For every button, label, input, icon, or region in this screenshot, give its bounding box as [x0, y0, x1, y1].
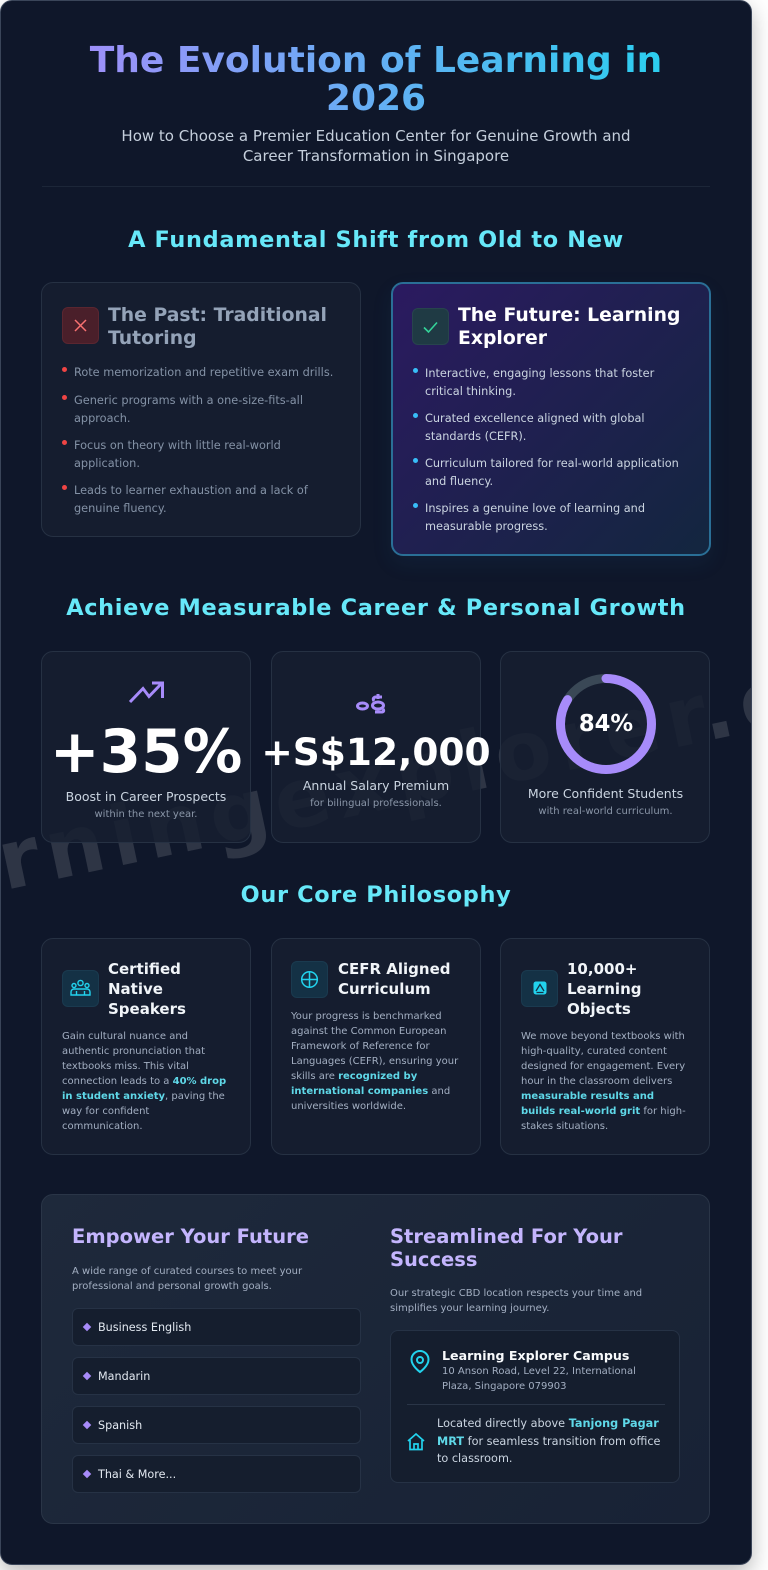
- title: [42, 42, 710, 118]
- list: future: Inspires a genuine love of learning and: [425, 502, 645, 515]
- heading: [567, 960, 642, 1018]
- heading: Speakers: [108, 1000, 186, 1018]
- heading: streamlined: Streamlined For Your: [390, 1225, 622, 1248]
- subtitle: How to Choose a Premier Education Center for Genuine Growth and: [121, 127, 631, 145]
- text: skills are recognized by: [291, 1071, 417, 1082]
- list: future: Interactive, engaging lessons that foster: [425, 367, 654, 380]
- heading: future: Explorer: [458, 328, 547, 349]
- stat label: Annual Salary Premium: [303, 778, 449, 793]
- panel: confidence stat: [500, 651, 710, 843]
- text: Languages (CEFR), ensuring your: [291, 1056, 458, 1067]
- heading: Objects: [567, 1000, 631, 1018]
- heading: past: The Past: Traditional: [108, 305, 327, 326]
- heading: shift: A Fundamental Shift from Old to New: [128, 227, 624, 253]
- text: Your progress is benchmarked: [291, 1011, 442, 1022]
- stat label: Boost in Career Prospects: [66, 789, 226, 804]
- heading: streamlined: Success: [390, 1248, 477, 1271]
- heading: 10,000+: [567, 960, 637, 978]
- heading: future: The Future: Learning: [458, 305, 680, 326]
- stat note: for bilingual professionals.: [310, 798, 442, 809]
- text: designed for engagement. Every: [521, 1061, 685, 1072]
- stat: 84%: 84%: [579, 711, 633, 737]
- text: measurable results and: [521, 1091, 654, 1102]
- text: international companies and: [291, 1086, 450, 1097]
- list: future: [413, 367, 679, 533]
- list: future: measurable progress.: [425, 520, 548, 533]
- list: future: critical thinking.: [425, 385, 516, 398]
- icon: coins: [356, 694, 386, 714]
- list: past: Focus on theory with little real-world: [74, 439, 281, 452]
- address: 10 Anson Road, Level 22, International: [442, 1366, 636, 1377]
- heading: growth: Achieve Measurable Career & Personal Growth: [66, 595, 686, 621]
- stat: +35%: +35%: [50, 718, 242, 787]
- icon: globe: [291, 961, 328, 998]
- text: builds real-world grit for high-: [521, 1106, 686, 1117]
- icon: learning object: [521, 970, 558, 1007]
- list: past: genuine fluency.: [74, 502, 167, 515]
- address: Plaza, Singapore 079903: [442, 1381, 566, 1392]
- title: 2026: [326, 78, 426, 119]
- text: textbooks miss. This vital: [62, 1061, 189, 1072]
- heading: Native: [108, 980, 163, 998]
- icon: trending up: [129, 682, 164, 703]
- subtitle: [121, 127, 631, 165]
- list: past: application.: [74, 457, 140, 470]
- icon: pin: [410, 1350, 430, 1374]
- stat: salary: +S$12,000: [261, 730, 491, 774]
- text: Framework of Reference for: [291, 1041, 430, 1052]
- heading: [338, 960, 450, 998]
- list: past: Leads to learner exhaustion and a lack of: [74, 484, 308, 497]
- address: [442, 1366, 636, 1392]
- icon: people: [62, 970, 99, 1007]
- text: [291, 1011, 458, 1112]
- subtitle: Career Transformation in Singapore: [243, 147, 509, 165]
- stat label: More Confident Students: [528, 786, 683, 801]
- course: mandarin: [72, 1357, 361, 1395]
- text: high-quality, curated content: [521, 1046, 667, 1057]
- heading: Certified: [108, 960, 181, 978]
- text: streamlined: simplifies your learning journey.: [390, 1303, 549, 1314]
- text: in student anxiety, paving the: [62, 1091, 225, 1102]
- course: spanish: [72, 1406, 361, 1444]
- heading: Curriculum: [338, 980, 431, 998]
- heading: streamlined: [390, 1225, 622, 1271]
- icon: cross: [62, 307, 99, 344]
- list: future: standards (CEFR).: [425, 430, 526, 443]
- panel: CEFR: [271, 938, 481, 1155]
- text: [62, 1031, 226, 1132]
- list: future: Curated excellence aligned with global: [425, 412, 645, 425]
- list: future: and fluency.: [425, 475, 493, 488]
- panel: learning objects: [500, 938, 710, 1155]
- course: thai: [72, 1455, 361, 1493]
- panel: the future: [391, 282, 711, 556]
- text: stakes situations.: [521, 1121, 608, 1132]
- course: business english: [72, 1308, 361, 1346]
- location box: [390, 1330, 680, 1483]
- list: past: Generic programs with a one-size-fits-all: [74, 394, 303, 407]
- text: way for confident: [62, 1106, 149, 1117]
- text: universities worldwide.: [291, 1101, 406, 1112]
- text: connection leads to a 40% drop: [62, 1076, 226, 1087]
- stat note: with real-world curriculum.: [538, 806, 673, 817]
- MRT text: [437, 1417, 660, 1465]
- text: [521, 1031, 686, 1132]
- list: past: Rote memorization and repetitive exam drills.: [74, 366, 333, 379]
- heading: past: Tutoring: [108, 328, 197, 349]
- course: spanish: Spanish: [98, 1419, 142, 1432]
- list: future: Curriculum tailored for real-world application: [425, 457, 679, 470]
- text: empower: [72, 1266, 302, 1292]
- heading: Learning: [567, 980, 642, 998]
- heading: philosophy: Our Core Philosophy: [241, 882, 511, 908]
- text: authentic pronunciation that: [62, 1046, 205, 1057]
- list: past: [62, 366, 333, 515]
- donut chart: 84%: [556, 674, 656, 774]
- course: mandarin: Mandarin: [98, 1370, 150, 1383]
- MRT text: Located directly above Tanjong Pagar: [437, 1417, 659, 1430]
- heading: CEFR Aligned: [338, 960, 450, 978]
- text: empower: professional and personal growth goals.: [72, 1281, 272, 1292]
- campus name: Learning Explorer Campus: [442, 1348, 629, 1363]
- heading: past: [108, 305, 327, 349]
- icon: home: [408, 1433, 424, 1450]
- text: communication.: [62, 1121, 143, 1132]
- heading: future: [458, 305, 680, 349]
- MRT text: to classroom.: [437, 1452, 512, 1465]
- text: streamlined: [390, 1288, 642, 1314]
- list: past: approach.: [74, 412, 130, 425]
- panel: salary stat: [271, 651, 481, 843]
- text: Gain cultural nuance and: [62, 1031, 188, 1042]
- text: empower: A wide range of curated courses to meet your: [72, 1266, 302, 1277]
- icon: check: [412, 308, 449, 345]
- heading: empower: Empower Your Future: [72, 1225, 309, 1248]
- course: business english: Business English: [98, 1321, 191, 1334]
- text: streamlined: Our strategic CBD location respects your time and: [390, 1288, 642, 1299]
- course: thai: Thai & More...: [98, 1468, 176, 1481]
- text: We move beyond textbooks with: [521, 1031, 685, 1042]
- MRT text: MRT for seamless transition from office: [437, 1435, 660, 1448]
- panel: career stat: [41, 651, 251, 843]
- text: against the Common European: [291, 1026, 446, 1037]
- panel: native speakers: [41, 938, 251, 1155]
- panel: the past: [41, 282, 361, 537]
- panel: bottom: [41, 1194, 710, 1524]
- stat note: within the next year.: [94, 809, 198, 820]
- text: hour in the classroom delivers: [521, 1076, 672, 1087]
- heading: [108, 960, 186, 1018]
- title: The Evolution of Learning in: [90, 40, 662, 81]
